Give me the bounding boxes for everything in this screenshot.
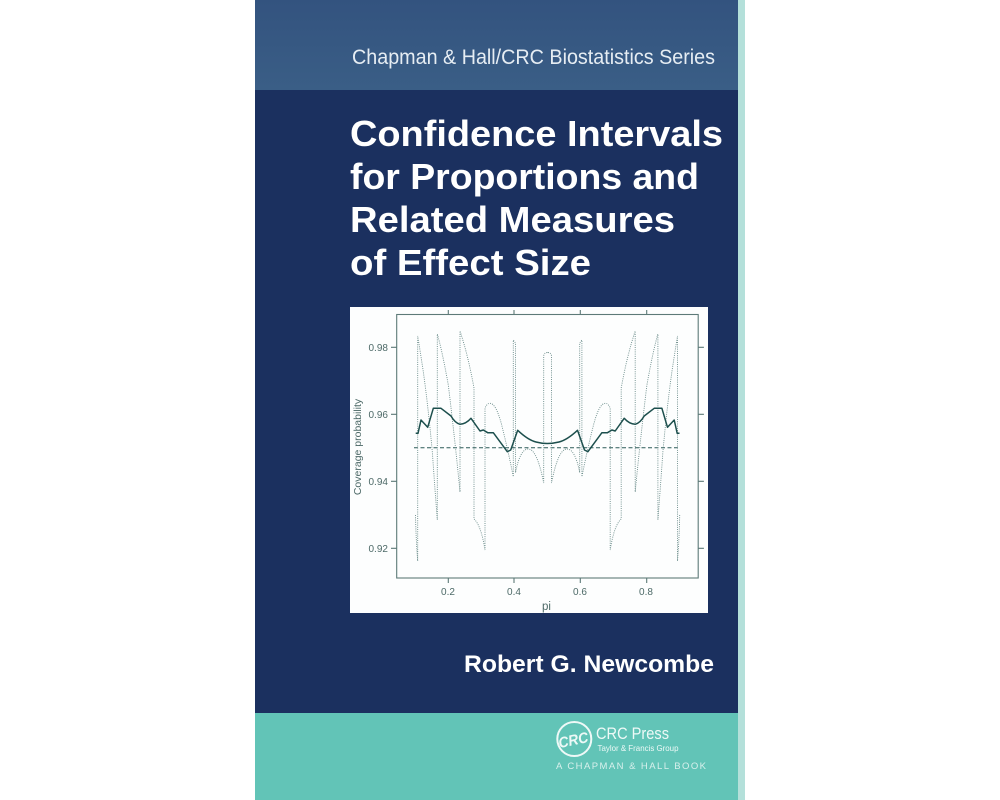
- x axis tick labels: 0.4: [507, 587, 521, 598]
- dotted coverage curve: [416, 331, 680, 561]
- series name: Chapman & Hall/CRC Biostatistics Series: [352, 46, 715, 69]
- panel: teal publisher band: [255, 713, 738, 800]
- icon: CRC circle logo: CRC: [557, 729, 591, 752]
- publisher group: Taylor & Francis Group: [598, 743, 679, 753]
- panel: right edge strip: [738, 0, 745, 800]
- plot frame and tick marks: [391, 310, 704, 583]
- imprint line: A CHAPMAN & HALL BOOK: [556, 761, 707, 772]
- title: [350, 113, 723, 283]
- y axis tick labels: 0.96: [368, 410, 388, 421]
- solid coverage curve: [416, 408, 680, 452]
- publisher logo: [556, 722, 707, 772]
- title: Related Measures: [350, 199, 675, 240]
- author name: Robert G. Newcombe: [464, 651, 714, 678]
- y axis tick labels: [368, 343, 388, 555]
- publisher name: CRC Press: [596, 724, 669, 743]
- title: Confidence Intervals: [350, 113, 723, 154]
- y axis tick labels: 0.92: [368, 544, 388, 555]
- x axis tick labels: 0.6: [573, 587, 587, 598]
- y axis tick labels: 0.98: [368, 343, 388, 354]
- panel: coverage probability chart: [350, 307, 708, 613]
- reference line at 0.95: [414, 447, 678, 449]
- panel: navy cover background: [255, 90, 738, 713]
- y axis tick labels: 0.94: [368, 477, 388, 488]
- x axis tick labels: 0.8: [639, 587, 653, 598]
- x axis tick labels: [441, 587, 653, 598]
- icon: CRC circle logo: [557, 722, 591, 756]
- x axis tick labels: 0.2: [441, 587, 455, 598]
- y axis label: Coverage probability: [352, 398, 364, 495]
- title: for Proportions and: [350, 156, 699, 197]
- panel: series header band: [255, 0, 738, 90]
- title: of Effect Size: [350, 242, 591, 283]
- x axis label: pi: [542, 601, 551, 613]
